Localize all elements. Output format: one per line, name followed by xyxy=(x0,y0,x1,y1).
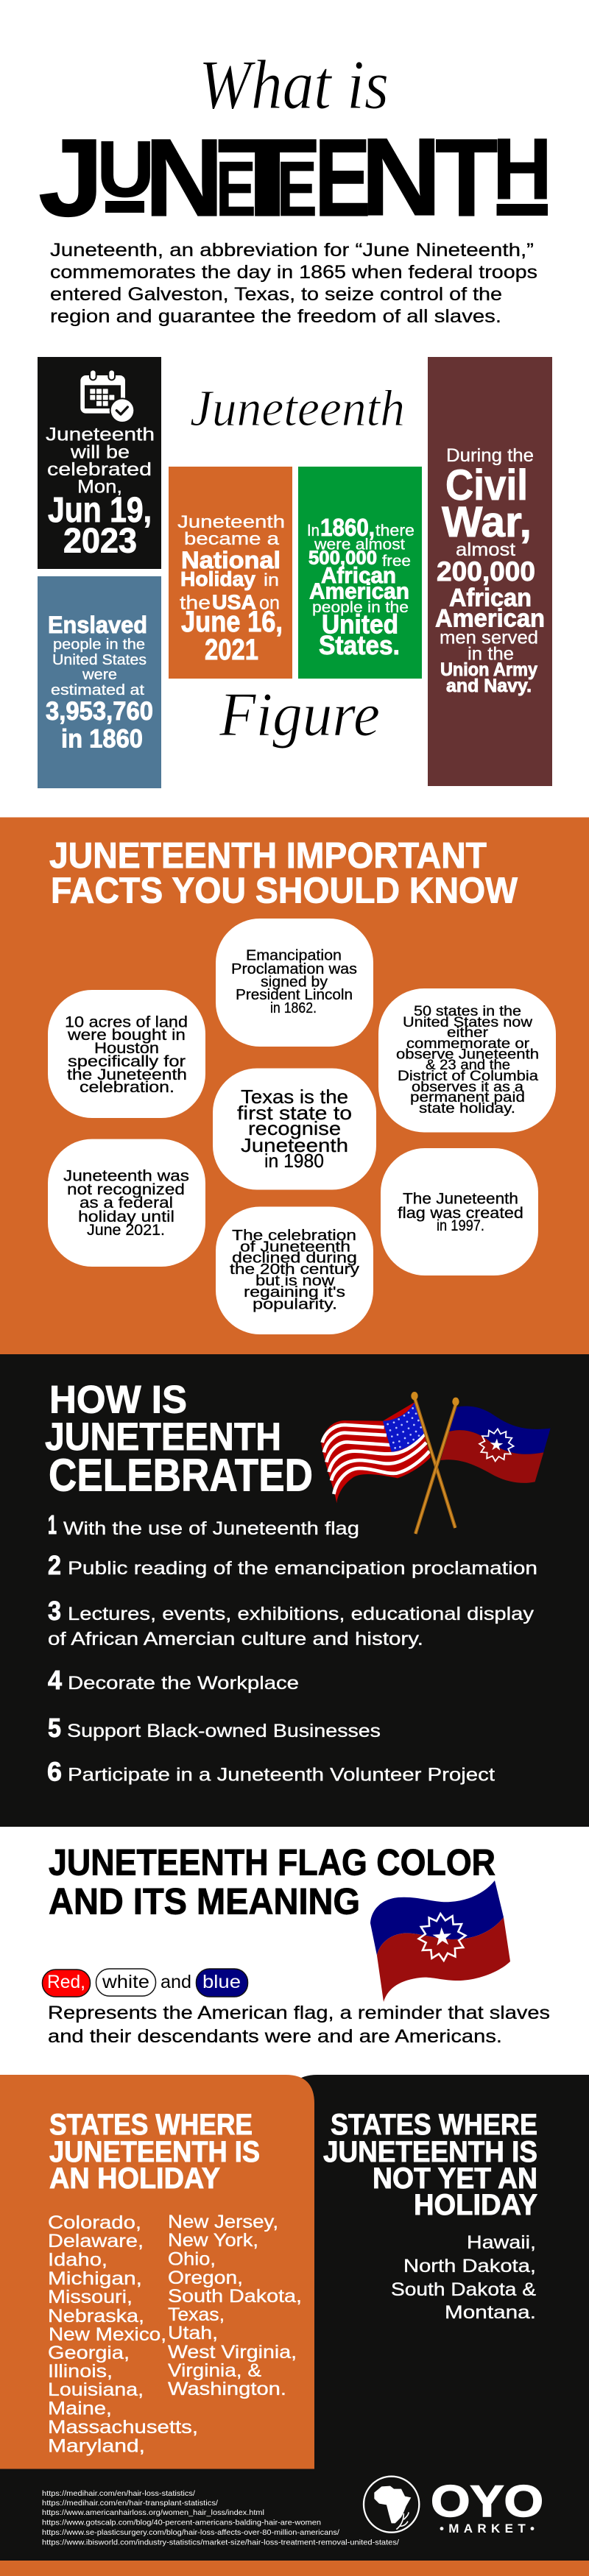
list: states column one: Idaho, xyxy=(48,2249,107,2270)
text: civil war xyxy=(435,445,545,696)
text: national holiday xyxy=(177,512,285,666)
list: states without holiday: Montana. xyxy=(445,2302,536,2323)
list: ways to celebrate: 2 xyxy=(48,1550,61,1580)
text: enslaved people: Enslaved xyxy=(48,612,147,638)
list: ways to celebrate: 5 xyxy=(48,1713,61,1743)
text: date card: Mon, xyxy=(77,477,122,498)
heading: states where an holiday xyxy=(49,2109,260,2195)
list: ways to celebrate xyxy=(47,1510,537,1787)
intro paragraph: entered Galveston, Texas, to seize control of the xyxy=(50,284,502,305)
fact: federal holiday: Juneteenth was xyxy=(63,1167,189,1185)
fact: Texas first state: recognise xyxy=(248,1117,341,1139)
panel: free African Americans card xyxy=(298,467,422,679)
list: states column two: Ohio, xyxy=(168,2249,216,2270)
list: states without holiday: South Dakota & xyxy=(391,2279,536,2300)
text: national holiday: in xyxy=(264,570,279,590)
text: national holiday: the xyxy=(180,592,211,614)
color pills: red white and blue: blue xyxy=(202,1972,241,1992)
source links: https://medihair.com/en/hair-transplant-statistics/ xyxy=(42,2499,218,2508)
text: 1860 free people: 1860, xyxy=(320,514,375,541)
fact: Texas first state xyxy=(213,1069,376,1189)
text: civil war: War, xyxy=(442,498,532,546)
fact: Texas first state: Juneteenth xyxy=(241,1134,348,1156)
fact: popularity: the 20th century xyxy=(230,1262,359,1278)
list: states column one: Maryland, xyxy=(48,2436,145,2457)
fact: popularity: of Juneteenth xyxy=(240,1239,350,1256)
list: states column two: Utah, xyxy=(168,2323,218,2343)
fact: popularity: The celebration xyxy=(232,1228,356,1244)
title: JUNETEENTH logotype: N xyxy=(144,116,224,239)
fact: flag created: The Juneteenth xyxy=(403,1191,518,1208)
heading: states where not yet a holiday xyxy=(323,2109,537,2221)
heading: states where not yet a holiday: HOLIDAY xyxy=(414,2189,537,2221)
text: civil war: During the xyxy=(446,445,534,466)
title: JUNETEENTH logotype: N xyxy=(361,115,442,238)
fact: emancipation proclamation: in 1862. xyxy=(270,1000,317,1016)
title: What is: What is xyxy=(199,46,389,124)
fact: emancipation proclamation: Proclamation was xyxy=(231,961,357,977)
text: national holiday: USA xyxy=(212,591,256,614)
text: enslaved people: in 1860 xyxy=(61,725,143,754)
source links: https://www.americanhairloss.org/women_hair_loss/index.html xyxy=(42,2508,264,2517)
color pills: red white and blue xyxy=(43,1969,247,1997)
fact: federal holiday xyxy=(48,1139,205,1267)
heading: important facts: JUNETEENTH IMPORTANT xyxy=(49,836,487,876)
fact: 50 states: either xyxy=(447,1025,489,1041)
title: JUNETEENTH logotype: H xyxy=(493,121,552,218)
text: flag meaning xyxy=(48,2003,550,2047)
title: JUNETEENTH logotype: E xyxy=(314,116,371,240)
script heading: Figure: Figure xyxy=(219,680,380,749)
panel: enslaved population card xyxy=(38,576,161,788)
text: enslaved people: estimated at xyxy=(51,682,145,698)
list: states column one: Michigan, xyxy=(48,2268,142,2289)
panel: how is Juneteenth celebrated xyxy=(0,1354,589,1827)
text: enslaved people: 3,953,760 xyxy=(46,697,153,726)
list: states column two: Virginia, & xyxy=(168,2360,261,2381)
text: 1860 free people: States. xyxy=(319,630,400,660)
text: date card: Juneteenth xyxy=(46,425,155,445)
list: states column two: New Jersey, xyxy=(168,2212,278,2232)
text: flag meaning: Represents the American flag, a reminder that slaves xyxy=(48,2003,550,2023)
fact: popularity xyxy=(216,1207,373,1334)
text: national holiday: Holiday xyxy=(180,567,255,590)
text: civil war: in the xyxy=(468,644,514,665)
text: civil war: Civil xyxy=(445,461,528,509)
heading: how is Juneteenth celebrated: JUNETEENTH xyxy=(45,1415,281,1459)
list: states column one: Nebraska, xyxy=(48,2306,144,2326)
fact: flag created xyxy=(381,1148,538,1275)
text: national holiday: National xyxy=(181,547,281,573)
text: enslaved people: were xyxy=(82,667,117,683)
list: states column one: Louisiana, xyxy=(48,2379,144,2400)
text: date card xyxy=(46,425,155,559)
list: states column two: Washington. xyxy=(168,2379,286,2399)
fact: emancipation proclamation: Emancipation xyxy=(246,948,342,964)
heading: flag color meaning xyxy=(49,1842,495,1922)
text: civil war: American xyxy=(435,605,545,633)
heading: how is Juneteenth celebrated: CELEBRATED xyxy=(49,1451,313,1501)
fact: popularity: but is now xyxy=(255,1273,335,1289)
title: JUNETEENTH logotype xyxy=(38,115,552,240)
fact: federal holiday: not recognized xyxy=(67,1181,185,1198)
text: national holiday: 2021 xyxy=(205,634,258,666)
fact: 50 states: 50 states in the xyxy=(414,1004,521,1019)
panel: date card xyxy=(38,357,161,569)
text: enslaved people xyxy=(46,612,153,754)
intro paragraph xyxy=(50,240,537,327)
text: 1860 free people: United xyxy=(322,609,398,639)
text: 1860 free people: there xyxy=(375,521,415,539)
source links: https://www.ibisworld.com/industry-statistics/market-size/hair-loss-treatment-removal-united-states/ xyxy=(42,2538,399,2547)
intro paragraph: Juneteenth, an abbreviation for “June Nineteenth,” xyxy=(50,240,534,261)
text: civil war: Union Army xyxy=(440,659,537,680)
list: states column one: Missouri, xyxy=(48,2287,133,2307)
list: states column two: West Virginia, xyxy=(168,2342,297,2363)
list: states column two: Oregon, xyxy=(168,2268,243,2288)
wordmark: Market: •MARKET• xyxy=(440,2522,535,2536)
intro paragraph: region and guarantee the freedom of all slaves. xyxy=(50,306,501,327)
list: ways to celebrate: Decorate the Workplace xyxy=(68,1673,299,1694)
text: civil war: 200,000 xyxy=(437,556,535,587)
text: flag meaning: and their descendants were and are Americans. xyxy=(48,2026,502,2047)
fact: emancipation proclamation: President Lincoln xyxy=(236,987,353,1003)
fact: flag created: in 1997. xyxy=(437,1217,484,1234)
text: 1860 free people: people in the xyxy=(312,599,409,616)
logo: OYO Market xyxy=(364,2477,543,2536)
script heading: Juneteenth: Juneteenth xyxy=(190,381,405,437)
text: 1860 free people: were almost xyxy=(314,536,405,553)
fact: popularity: declined during xyxy=(232,1250,357,1266)
list: states column two: South Dakota, xyxy=(168,2286,302,2307)
source links: https://medihair.com/en/hair-loss-statistics/ xyxy=(42,2489,195,2498)
list: states column one: Massachusetts, xyxy=(48,2417,198,2438)
list: ways to celebrate: With the use of Juneteenth flag xyxy=(63,1518,359,1539)
text: date card: Jun 19, xyxy=(48,491,152,530)
fact: emancipation proclamation xyxy=(216,919,373,1047)
text: civil war: almost xyxy=(456,539,515,560)
list: states column one xyxy=(48,2212,198,2457)
text: national holiday: became a xyxy=(184,529,280,549)
footer strip xyxy=(0,2561,589,2576)
list: ways to celebrate: of African Amercian culture and history. xyxy=(48,1629,423,1649)
fact: 10 acres of land: were bought in xyxy=(67,1027,186,1044)
list: states column one: Illinois, xyxy=(48,2361,113,2382)
text: civil war: and Navy. xyxy=(446,676,532,696)
panel: national holiday card xyxy=(169,467,292,679)
fact: 50 states: United States now xyxy=(403,1015,532,1030)
fact: Texas first state: Texas is the xyxy=(241,1086,348,1108)
source links xyxy=(42,2489,399,2547)
list: ways to celebrate: 4 xyxy=(48,1665,62,1695)
fact: 50 states: observes it as a xyxy=(412,1080,523,1095)
color pills: red white and blue: and xyxy=(161,1972,191,1992)
text: national holiday: Juneteenth xyxy=(177,512,285,532)
heading: flag color meaning: JUNETEENTH FLAG COLOR xyxy=(49,1842,495,1883)
fact: flag created: flag was created xyxy=(398,1205,523,1222)
text: enslaved people: people in the xyxy=(53,637,145,653)
list: ways to celebrate: 3 xyxy=(48,1596,61,1626)
fact: 10 acres of land: Houston xyxy=(94,1040,159,1057)
source links: https://www.gotscalp.com/blog/40-percent-americans-balding-hair-are-women xyxy=(42,2519,321,2527)
list: ways to celebrate: Lectures, events, exhibitions, educational display xyxy=(68,1604,535,1624)
text: date card: celebrated xyxy=(47,459,152,480)
text: 1860 free people: 500,000 xyxy=(308,546,377,568)
fact: 50 states: observe Juneteenth xyxy=(396,1047,539,1063)
source links: https://www.se-plasticsurgery.com/blog/hair-loss-affects-over-80-million-americans/ xyxy=(42,2528,339,2537)
title: JUNETEENTH logotype: J xyxy=(38,116,104,239)
list: ways to celebrate: Support Black-owned Businesses xyxy=(67,1721,381,1741)
fact: popularity: popularity. xyxy=(253,1297,337,1313)
heading: states where an holiday: STATES WHERE xyxy=(49,2109,253,2141)
fact: federal holiday: holiday until xyxy=(78,1209,174,1225)
fact: 50 states: commemorate or xyxy=(406,1036,530,1052)
panel: civil war card xyxy=(428,357,552,786)
list: states column two: Texas, xyxy=(168,2304,225,2325)
panel: important facts xyxy=(0,817,589,1354)
list: states column one: Delaware, xyxy=(48,2231,144,2251)
text: date card: 2023 xyxy=(63,520,137,559)
heading: states where not yet a holiday: STATES WHERE xyxy=(331,2109,537,2141)
list: states column one: Maine, xyxy=(48,2398,112,2418)
panel: states not yet holiday (dark) xyxy=(0,2075,589,2561)
fact: popularity: regaining it's xyxy=(244,1284,345,1301)
text: national holiday: June 16, xyxy=(181,606,283,638)
text: civil war: men served xyxy=(440,628,538,648)
heading: states where an holiday: JUNETEENTH IS xyxy=(49,2136,260,2168)
list: states column one: Georgia, xyxy=(48,2343,130,2363)
text: 1860 free people xyxy=(307,514,415,660)
icon: Juneteenth flag xyxy=(370,1880,510,2002)
list: ways to celebrate: 6 xyxy=(47,1757,62,1787)
text: 1860 free people: African xyxy=(321,562,396,588)
intro paragraph: commemorates the day in 1865 when federal troops xyxy=(50,262,537,283)
color pills: red white and blue: Red, xyxy=(47,1972,85,1992)
panel: flag color meaning xyxy=(43,1842,550,2047)
list: states column two xyxy=(168,2212,302,2399)
list: states without holiday xyxy=(391,2232,536,2323)
list: states column one: New Mexico, xyxy=(49,2324,166,2345)
title: JUNETEENTH logotype: T xyxy=(217,116,317,239)
fact: 50 states xyxy=(378,988,556,1132)
title: JUNETEENTH logotype: E xyxy=(277,146,317,233)
text: 1860 free people: In xyxy=(307,521,320,539)
heading: important facts xyxy=(49,836,518,911)
list: ways to celebrate: Participate in a Juneteenth Volunteer Project xyxy=(68,1765,495,1786)
fact: 10 acres of land: 10 acres of land xyxy=(65,1014,188,1030)
heading: how is Juneteenth celebrated: HOW IS xyxy=(49,1379,187,1422)
fact: Texas first state: first state to xyxy=(237,1102,352,1124)
fact: 10 acres of land: celebration. xyxy=(80,1079,174,1096)
icon: Africa in circle xyxy=(364,2477,419,2533)
fact: Texas first state: in 1980 xyxy=(264,1150,324,1172)
fact: 50 states: state holiday. xyxy=(419,1101,515,1117)
text: enslaved people: United States xyxy=(52,652,147,668)
fact: federal holiday: as a federal xyxy=(80,1195,173,1211)
icon: calendar with check xyxy=(80,369,135,423)
fact: 50 states: & 23 and the xyxy=(426,1058,510,1073)
list: states without holiday: North Dakota, xyxy=(403,2256,536,2276)
color pills: red white and blue: white xyxy=(102,1972,149,1992)
icon: crossed flags xyxy=(322,1392,551,1534)
fact: 10 acres of land xyxy=(48,990,205,1118)
fact: 10 acres of land: the Juneteenth xyxy=(67,1066,187,1083)
list: states column two: New York, xyxy=(168,2230,258,2251)
list: ways to celebrate: Public reading of the emancipation proclamation xyxy=(68,1558,537,1579)
title: JUNETEENTH logotype: E xyxy=(216,146,256,233)
text: national holiday: on xyxy=(259,592,280,614)
fact: 50 states: District of Columbia xyxy=(398,1069,538,1084)
text: date card: will be xyxy=(70,442,130,463)
text: 1860 free people: American xyxy=(309,578,409,604)
list: ways to celebrate: 1 xyxy=(48,1510,57,1540)
heading: states where not yet a holiday: JUNETEENTH IS xyxy=(323,2136,537,2168)
list: states without holiday: Hawaii, xyxy=(467,2232,536,2253)
wordmark: OYO: OYO xyxy=(431,2477,543,2526)
panel: states with holiday (orange) xyxy=(0,2075,314,2469)
title: JUNETEENTH logotype: U xyxy=(96,124,155,214)
text: 1860 free people: free xyxy=(382,553,411,570)
fact: federal holiday: June 2021. xyxy=(87,1222,165,1239)
title: JUNETEENTH logotype: T xyxy=(435,116,498,239)
heading: how is Juneteenth celebrated xyxy=(45,1379,313,1501)
heading: states where not yet a holiday: NOT YET AN xyxy=(373,2162,537,2195)
heading: flag color meaning: AND ITS MEANING xyxy=(49,1881,360,1922)
heading: important facts: FACTS YOU SHOULD KNOW xyxy=(51,871,518,911)
fact: emancipation proclamation: signed by xyxy=(261,974,328,991)
text: civil war: African xyxy=(449,584,532,612)
heading: states where an holiday: AN HOLIDAY xyxy=(49,2162,220,2195)
fact: 50 states: permanent paid xyxy=(410,1090,525,1105)
fact: 10 acres of land: specifically for xyxy=(68,1053,186,1070)
list: states column one: Colorado, xyxy=(48,2212,141,2233)
